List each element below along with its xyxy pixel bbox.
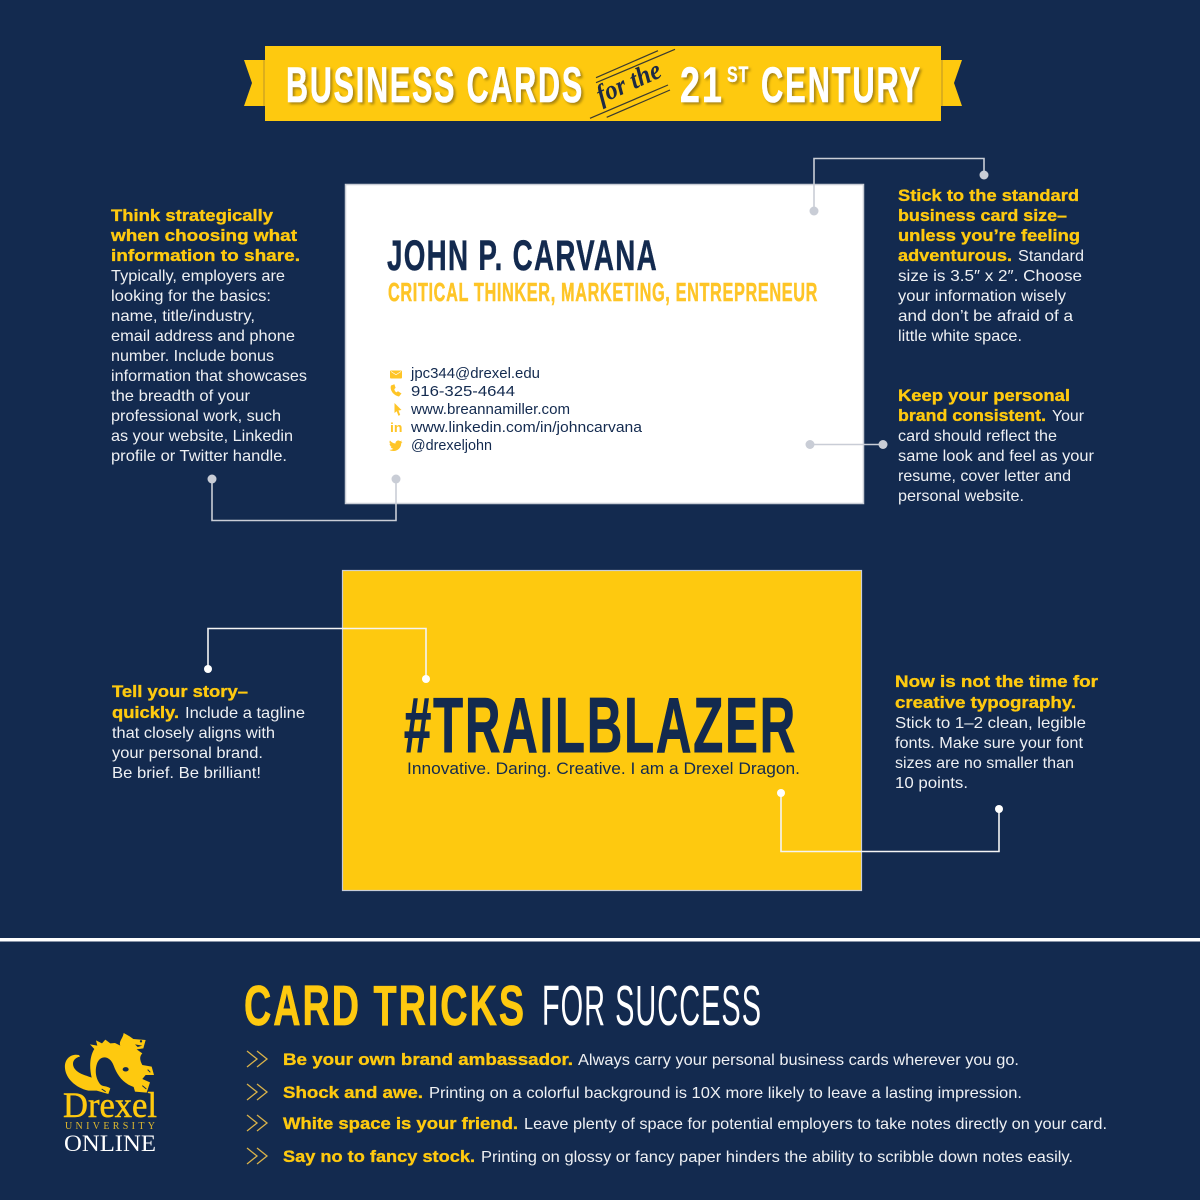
callout: brand consistent: resume, cover letter and [898, 468, 1071, 485]
Online wordmark: ONLINE [64, 1131, 156, 1156]
callout: think strategically: information to share. [111, 246, 300, 265]
tip: white space: White space is your friend. [283, 1114, 518, 1133]
callout: think strategically: as your website, Linkedin [111, 428, 293, 445]
callout: think strategically: Think strategically [111, 206, 274, 225]
contact details: 916-325-4644 [411, 383, 515, 400]
callout: think strategically: when choosing what [110, 226, 297, 245]
contact details [410, 365, 643, 454]
icon: dragon [65, 1033, 154, 1094]
callout: think strategically: name, title/industry, [111, 308, 255, 325]
tip: shock and awe: Printing on a colorful background is 10X more likely to leave a lasting impression. [429, 1085, 1022, 1102]
callout: typography: Now is not the time for [895, 672, 1098, 691]
callout: brand consistent: personal website. [898, 488, 1024, 505]
logo: Drexel University Online [63, 1033, 157, 1156]
callout: tell your story: Be brief. Be brilliant! [112, 765, 261, 782]
connector: strategy callout to contact details [208, 474, 400, 520]
callout: think strategically: number. Include bonus [111, 348, 274, 365]
callout: standard size: business card size– [898, 206, 1067, 225]
heading: card tricks for success: FOR SUCCESS [542, 974, 762, 1038]
callout: brand consistent: Your [1052, 408, 1085, 425]
callout: standard size: adventurous. [898, 246, 1012, 265]
tip: brand ambassador: Always carry your personal business cards wherever you go. [578, 1052, 1019, 1069]
card title line: CRITICAL THINKER, MARKETING, ENTREPRENEUR [388, 277, 818, 307]
callout: think strategically: Typically, employers are [111, 268, 285, 285]
hashtag: #TRAILBLAZER [404, 681, 797, 769]
callout: think strategically: professional work, such [111, 408, 281, 425]
tip: brand ambassador [247, 1050, 1019, 1069]
callout: typography: sizes are no smaller than [895, 755, 1074, 772]
callout: think strategically: looking for the basics: [111, 288, 271, 305]
callout: tell your story: that closely aligns with [112, 725, 275, 742]
callout: standard size: and don’t be afraid of a [898, 308, 1073, 325]
callout: brand consistent: same look and feel as your [898, 448, 1095, 465]
callout: typography: creative typography. [895, 693, 1076, 712]
tip: shock and awe: Shock and awe. [283, 1083, 423, 1102]
tip: white space: Leave plenty of space for potential employers to take notes directly on your card. [524, 1116, 1107, 1133]
connector: brand callout [806, 440, 888, 449]
title banner: for the [591, 54, 666, 109]
University wordmark: UNIVERSITY [65, 1121, 155, 1132]
tagline: Innovative. Daring. Creative. I am a Drexel Dragon. [407, 759, 800, 778]
callout: standard size: your information wisely [898, 288, 1066, 305]
callout: standard size: Stick to the standard [898, 186, 1079, 205]
callout: standard size [898, 186, 1084, 345]
contact details: @drexeljohn [411, 437, 492, 454]
contact icons [389, 370, 403, 451]
title banner: ST [727, 62, 749, 87]
callout: typography [895, 672, 1098, 792]
tip: fancy stock: Printing on glossy or fancy paper hinders the ability to scribble down notes easily. [481, 1149, 1073, 1166]
callout: typography: fonts. Make sure your font [895, 735, 1084, 752]
callout: standard size: size is 3.5″ x 2″. Choose [898, 268, 1082, 285]
callout: tell your story: Tell your story– [112, 682, 248, 701]
title banner: 21 [680, 57, 724, 113]
callout: think strategically: profile or Twitter handle. [111, 448, 287, 465]
title banner: CENTURY [761, 57, 922, 113]
callout: standard size: unless you’re feeling [898, 226, 1080, 245]
contact details: www.breannamiller.com [410, 401, 570, 418]
callout: think strategically: information that showcases [111, 368, 307, 385]
tip: fancy stock [247, 1147, 1073, 1166]
tip: fancy stock: Say no to fancy stock. [283, 1147, 475, 1166]
title banner [244, 46, 962, 121]
callout: typography: 10 points. [895, 775, 968, 792]
title banner: BUSINESS CARDS [286, 57, 584, 113]
connector: card size callout [810, 158, 988, 216]
callout: typography: Stick to 1–2 clean, legible [895, 715, 1086, 732]
callout: brand consistent [898, 386, 1095, 505]
callout: brand consistent: brand consistent. [898, 406, 1046, 425]
connector: typography callout to tagline [777, 789, 1003, 852]
panel: white business card [346, 184, 864, 504]
callout: brand consistent: Keep your personal [898, 386, 1070, 405]
Drexel wordmark: Drexel [63, 1085, 157, 1125]
heading: card tricks for success: CARD TRICKS [244, 974, 526, 1038]
contact details: jpc344@drexel.edu [410, 365, 540, 382]
tip: brand ambassador: Be your own brand ambassador. [283, 1050, 573, 1069]
callout: think strategically: the breadth of your [111, 388, 251, 405]
card name: JOHN P. CARVANA [387, 232, 658, 280]
callout: brand consistent: card should reflect the [898, 428, 1057, 445]
callout: think strategically [110, 206, 307, 465]
callout: tell your story: your personal brand. [112, 745, 263, 762]
tip: shock and awe [247, 1083, 1022, 1102]
callout: standard size: little white space. [898, 328, 1022, 345]
contact details: www.linkedin.com/in/johncarvana [410, 419, 643, 436]
connector: story callout to hashtag [204, 628, 430, 683]
callout: standard size: Standard [1018, 248, 1084, 265]
callout: tell your story [112, 682, 305, 782]
tip: white space [247, 1114, 1107, 1133]
callout: tell your story: Include a tagline [185, 705, 305, 722]
panel: yellow tagline card [342, 570, 862, 890]
contact icons: in [390, 420, 403, 435]
callout: think strategically: email address and phone [111, 328, 295, 345]
callout: tell your story: quickly. [112, 703, 179, 722]
